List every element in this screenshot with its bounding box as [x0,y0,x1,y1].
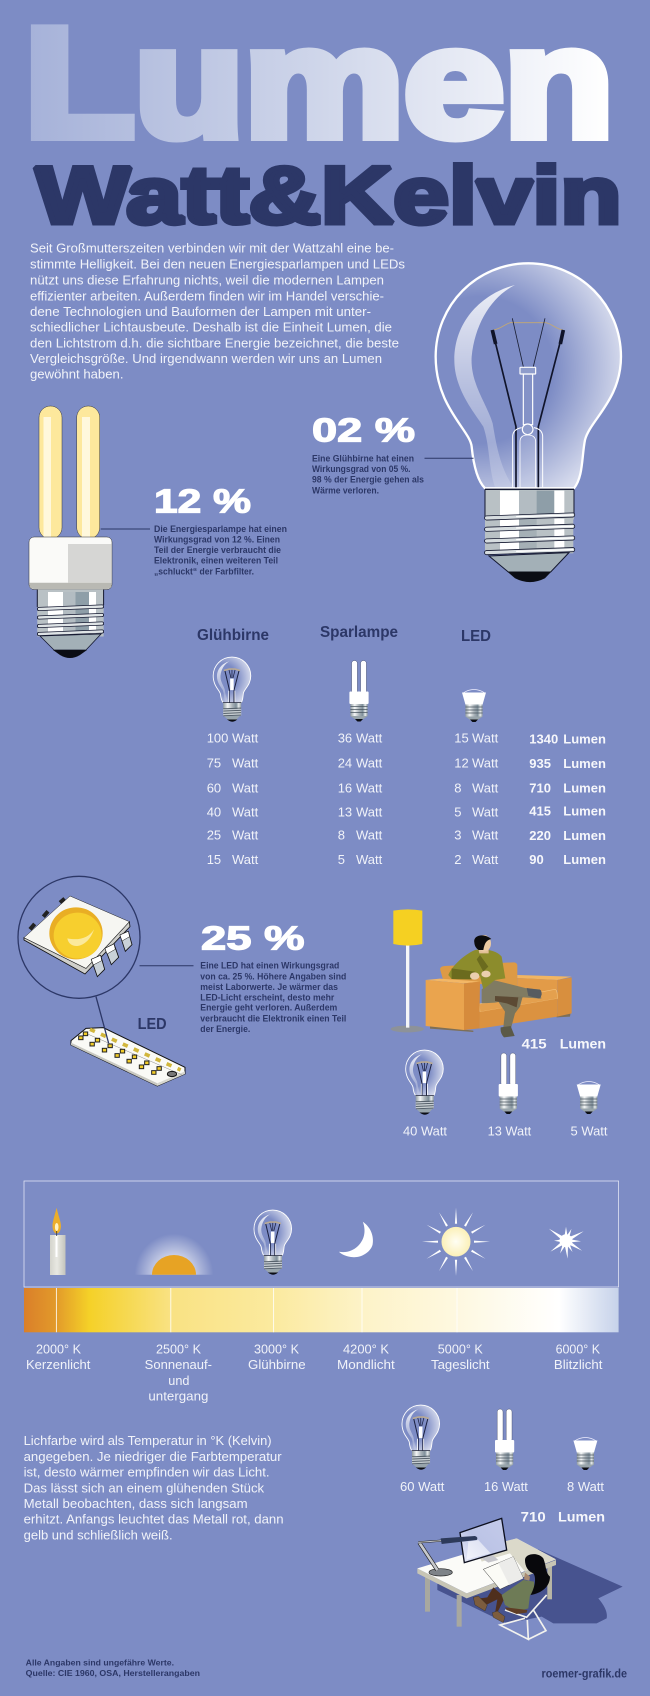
column: saving lamp wattages: 16 [338,780,352,795]
column: bulb wattages: Watt [232,852,259,867]
callout: 12 percent: Die Energiesparlampe hat einen [154,524,287,535]
callout: 12 percent: Wirkungsgrad von 12 %. Einen [154,535,280,546]
title: Lumen: Lumen [25,0,614,169]
label: 415 Lumen [522,1037,606,1053]
column: lumen values: Lumen [563,781,606,796]
column: LED wattages: Watt [472,731,499,746]
column: LED wattages: Watt [472,780,499,795]
labels: 415 lumen wattages: 40 Watt [403,1123,447,1138]
column: saving lamp wattages: 36 [338,731,352,746]
icon: flash star [548,1227,585,1259]
column: LED wattages: 5 [454,805,462,820]
column: bulb wattages [207,731,259,867]
callout: 12 percent: Elektronik, einen weiteren Teil [154,556,278,567]
kelvin labels: 2500° K [156,1341,201,1356]
illustration: woman reading at desk [417,1518,623,1639]
callout: 12 percent: 12 % [154,482,251,520]
heading: Sparlampe: Sparlampe [320,624,398,641]
footer: website: roemer-grafik.de [542,1666,627,1680]
callout: 25 percent: meist Laborwerte. Je wärmer das [200,982,338,993]
labels: 710 lumen wattages: 60 Watt [400,1479,445,1494]
callout: 25 percent: verbraucht die Elektronik einen Teil [200,1013,346,1024]
column: lumen values: Lumen [563,804,606,819]
callout: 02 percent: Wärme verloren. [312,485,379,496]
kelvin labels [26,1341,603,1404]
kelvin labels: untergang [148,1389,208,1404]
column: bulb wattages: Watt [232,827,259,842]
intro text block: dene Technologien und Bauformen der Lampen mit unter- [30,304,371,319]
column: lumen values: Lumen [563,828,606,843]
column: saving lamp wattages: 24 [338,755,352,770]
column: saving lamp wattages: 5 [338,852,345,867]
icon: large incandescent bulb [436,263,621,582]
column: LED wattages: Watt [472,852,499,867]
column: saving lamp wattages: Watt [356,755,383,770]
icon: moon [339,1222,373,1257]
kelvin labels: und [168,1373,190,1388]
icon: daylight sun [422,1208,490,1276]
column: lumen values: 935 [529,756,551,771]
column: saving lamp wattages: Watt [356,827,383,842]
column: saving lamp wattages: Watt [356,852,383,867]
icon: candle [50,1208,66,1275]
column: lumen values: Lumen [563,852,606,867]
text block: colour temperature explanation: erhitzt. Anfangs leuchtet das Metall rot, dann [24,1512,284,1527]
footnote: sources [26,1658,200,1678]
text block: colour temperature explanation: angegeben. Je niedriger die Farbtemperatur [24,1449,282,1464]
callout: 25 percent: Eine LED hat einen Wirkungsgrad [200,961,339,972]
column: LED wattages: 15 [454,731,469,746]
callout: 02 percent: 98 % der Energie gehen als [312,475,424,486]
column: bulb wattages: 25 [207,827,221,842]
column: LED wattages: 8 [454,780,462,795]
callout: 02 percent [312,412,474,496]
intro text block: stimmte Helligkeit. Bei den neuen Energiesparlampen und LEDs [30,257,406,272]
labels: 415 lumen wattages: 5 Watt [570,1123,608,1138]
callout: 25 percent: 25 % [201,920,304,956]
column: lumen values: 220 [529,828,551,843]
labels: 415 lumen wattages [403,1123,608,1138]
icon: sunrise [135,1234,213,1275]
labels: 710 lumen wattages [400,1479,604,1494]
text block: colour temperature explanation [24,1433,284,1542]
callout: 12 percent: Teil der Energie verbraucht die [154,545,281,556]
comparison table [197,624,606,867]
column: lumen values [529,731,606,867]
column: LED wattages: 2 [454,852,462,867]
labels: 710 lumen wattages: 8 Watt [567,1479,604,1494]
column: saving lamp wattages: 13 [338,805,352,820]
kelvin labels: Sonnenauf- [145,1357,212,1372]
label: 710 Lumen: 710 [521,1510,546,1526]
kelvin labels: Tageslicht [431,1357,490,1372]
icons: 415 lumen lamps [406,1050,601,1115]
column: bulb wattages: 60 [207,780,221,795]
icon: small bulb [213,657,251,722]
kelvin labels: 3000° K [254,1341,299,1356]
kelvin labels: Glühbirne [248,1357,306,1372]
column: bulb wattages: Watt [232,780,259,795]
illustration: man on sofa with floor lamp [391,909,572,1037]
label: 710 Lumen: Lumen [558,1510,605,1526]
heading: LED: LED [461,628,491,645]
column: bulb wattages: Watt [232,755,259,770]
colour temperature gradient bar [24,1288,619,1332]
column: saving lamp wattages: Watt [356,805,383,820]
icon: large energy-saving lamp [29,406,112,658]
column: LED wattages: Watt [472,755,499,770]
intro text block: den Lichtstrom d.h. die sichtbare Energie bezeichnet, die beste [30,335,399,350]
footnote: sources: Alle Angaben sind ungefähre Werte. [26,1658,174,1668]
labels: 415 lumen wattages: 13 Watt [488,1123,532,1138]
column: bulb wattages: 15 [207,852,221,867]
callout: 25 percent: der Energie. [200,1024,250,1035]
text block: colour temperature explanation: Das lässt sich an einem glühenden Stück [24,1480,265,1495]
kelvin labels: 4200° K [343,1341,389,1356]
column: LED wattages: Watt [472,805,499,820]
text block: colour temperature explanation: ist, desto wärmer empfinden wir das Licht. [24,1465,270,1480]
kelvin labels: Mondlicht [337,1357,395,1372]
column: lumen values: 1340 [529,731,558,746]
text block: colour temperature explanation: Metall beobachten, dass sich langsam [24,1496,248,1511]
callout: 12 percent: „schluckt“ der Farbfilter. [154,566,254,577]
column: lumen values: 415 [529,804,551,819]
callout: 02 percent: Eine Glühbirne hat einen [312,453,414,464]
callout: 25 percent: LED-Licht erscheint, desto mehr [200,992,335,1003]
column: LED wattages: 3 [454,827,462,842]
column: bulb wattages: Watt [232,731,259,746]
kelvin labels: Blitzlicht [554,1357,603,1372]
labels: 710 lumen wattages: 16 Watt [484,1479,528,1494]
panel: colour temperature frame [24,1181,619,1287]
callout: 25 percent [200,920,346,1035]
intro text block: Seit Großmutterszeiten verbinden wir mit der Wattzahl eine be- [30,241,394,256]
icon: bulb [254,1210,292,1275]
label: 415 Lumen: Lumen [560,1037,606,1053]
column: LED wattages: Watt [472,827,499,842]
intro text block: schiedlicher Lichtausbeute. Deshalb ist die Einheit Lumen, die [30,320,392,335]
icon: small saving lamp [349,660,369,722]
column: saving lamp wattages: 8 [338,827,345,842]
intro text block: Vergleichsgröße. Und irgendwann werden wir uns an Lumen [30,351,382,366]
kelvin labels: 2000° K [36,1341,81,1356]
kelvin labels: Kerzenlicht [26,1357,91,1372]
intro text block: effizienter arbeiten. Außerdem finden wir im Handel verschie- [30,288,384,303]
title: Watt & Kelvin: Watt&Kelvin [36,151,622,241]
icon: LED chip in magnifier circle with LED strip [18,876,194,1086]
column: bulb wattages: 40 [207,805,221,820]
text block: colour temperature explanation: Lichfarbe wird als Temperatur in °K (Kelvin) [24,1433,272,1448]
callout: 12 percent [101,482,287,577]
label: LED: LED [138,1016,167,1033]
callout: 25 percent: Energie geht verloren. Außerdem [200,1003,337,1014]
kelvin labels: 5000° K [438,1341,483,1356]
column: saving lamp wattages [338,731,383,867]
callout: 25 percent: von ca. 25 %. Höhere Angaben sind [200,971,346,982]
column: LED wattages [454,731,499,867]
intro text block [30,241,406,382]
intro text block: gewöhnt haben. [30,367,124,382]
column: lumen values: Lumen [563,731,606,746]
column: bulb wattages: 100 [207,731,228,746]
column: bulb wattages: Watt [232,805,259,820]
column: saving lamp wattages: Watt [356,731,383,746]
intro text block: nützt uns diese Erfahrung nichts, weil die modernen Lampen [30,273,384,288]
kelvin labels: 6000° K [556,1341,600,1356]
column: lumen values: Lumen [563,756,606,771]
label: 415 Lumen: 415 [522,1037,547,1053]
heading: Glühbirne: Glühbirne [197,627,269,644]
column: saving lamp wattages: Watt [356,780,383,795]
column: LED wattages: 12 [454,755,469,770]
column: bulb wattages: 75 [207,755,221,770]
icons: 710 lumen lamps [402,1405,597,1470]
callout: 02 percent: Wirkungsgrad von 05 %. [312,464,410,475]
label: 710 Lumen [521,1510,605,1526]
column: lumen values: 90 [529,852,544,867]
icon: small LED lamp [462,690,486,722]
footnote: sources: Quelle: CIE 1960, OSA, Herstellerangaben [26,1668,200,1678]
callout: 02 percent: 02 % [312,412,415,448]
column: lumen values: 710 [529,781,551,796]
text block: colour temperature explanation: gelb und schließlich weiß. [24,1527,173,1542]
